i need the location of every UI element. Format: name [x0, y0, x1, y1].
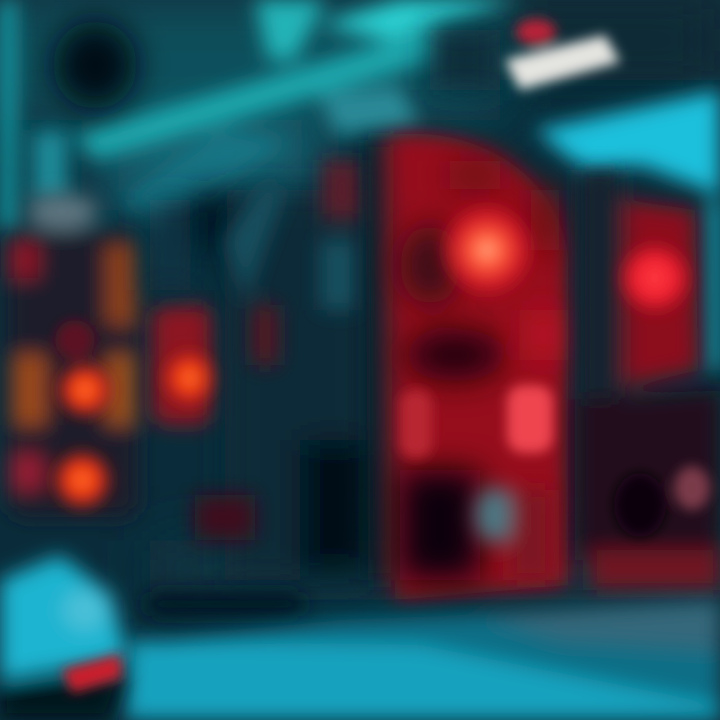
left unit body: [8, 194, 138, 517]
teal ceiling beams: [0, 0, 520, 230]
right machine: [575, 170, 720, 590]
large machine lights: [400, 198, 553, 458]
white and red sign top right: [505, 19, 620, 90]
dark circle top left: [53, 21, 500, 109]
dark details on large machine: [400, 160, 560, 580]
second small red unit: [152, 305, 214, 425]
floor: [120, 600, 720, 720]
center dark column: [150, 188, 370, 580]
left unit lights: [46, 320, 119, 516]
car tail light: [62, 654, 122, 693]
upper right cyan panel: [535, 90, 720, 370]
center teal and red accents: [145, 160, 362, 616]
car at bottom left: [0, 555, 128, 720]
grey-blue patch: [475, 487, 552, 580]
large red machine: [368, 134, 568, 600]
